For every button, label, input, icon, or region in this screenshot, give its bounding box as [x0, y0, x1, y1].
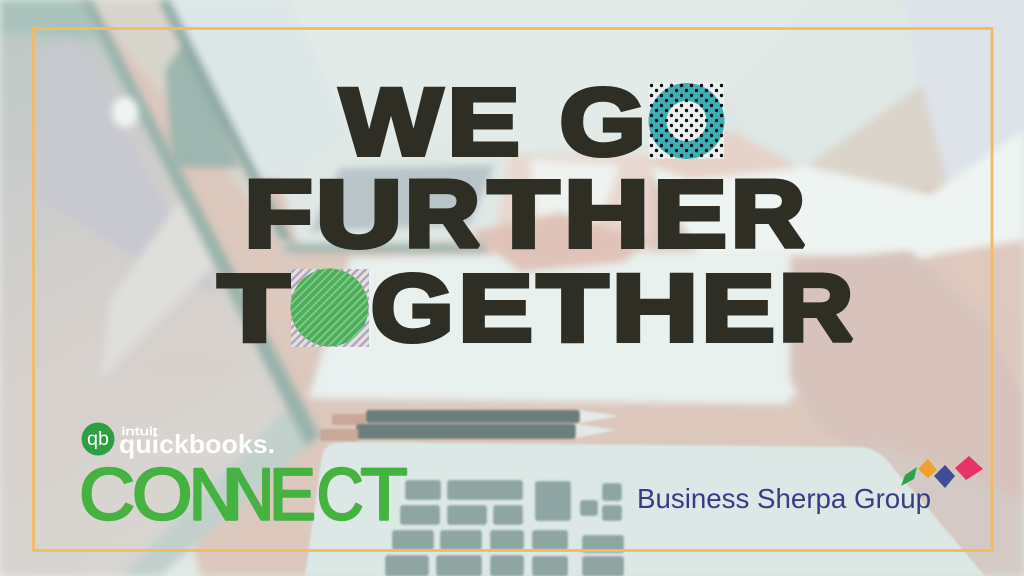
- headline line 3: T and GETHER: E: [702, 256, 775, 362]
- logo: Intuit QuickBooks Connect: [79, 422, 408, 536]
- headline line 1: WE G: W: [340, 70, 442, 176]
- headline line 2: FURTHER: H: [564, 162, 649, 268]
- logo: Business Sherpa Group: [637, 456, 983, 514]
- headline line 3: T and GETHER: T: [218, 256, 291, 362]
- headline line 2: FURTHER: F: [244, 162, 313, 268]
- text: intuit: intuit: [122, 426, 158, 438]
- text: CONNECT: E: [269, 454, 316, 536]
- headline line 2: FURTHER: E: [654, 162, 727, 268]
- headline line 2: FURTHER: R: [405, 162, 480, 268]
- headline line 3: T and GETHER: [218, 256, 853, 362]
- headline line 2: FURTHER: R: [731, 162, 805, 268]
- bottom laptop and keyboard: [305, 442, 985, 576]
- headline line 3: T and GETHER: E: [458, 256, 533, 362]
- headline line 1: WE G: E: [448, 70, 520, 176]
- icon: green O with diagonal stripes: [290, 268, 369, 347]
- text: CONNECT: C: [79, 454, 135, 536]
- icon: quickbooks circle: qb: [87, 429, 109, 450]
- text: CONNECT: T: [360, 454, 408, 536]
- headline line 3: T and GETHER: H: [612, 256, 698, 362]
- pens on the desk: [320, 410, 620, 441]
- icon: four coloured diamonds: [901, 456, 983, 488]
- headline line 1: WE G: G: [560, 70, 646, 176]
- headline line 2: FURTHER: [244, 162, 805, 268]
- text: CONNECT: N: [226, 454, 274, 536]
- icon: quickbooks circle: [82, 422, 114, 456]
- left laptop screen: [0, 0, 320, 576]
- headline line 2: FURTHER: U: [316, 162, 402, 268]
- text: CONNECT: [79, 454, 408, 536]
- text: CONNECT: O: [132, 454, 193, 536]
- headline: WE GO FURTHER TOGETHER: [218, 70, 853, 362]
- icon: teal O with dot pattern: [649, 83, 725, 159]
- headline line 3: T and GETHER: T: [537, 256, 608, 362]
- headline line 3: T and GETHER: R: [779, 256, 853, 362]
- headline line 2: FURTHER: T: [488, 162, 559, 268]
- headline line 3: T and GETHER: G: [371, 256, 454, 362]
- text: quickbooks: quickbooks.: [119, 429, 275, 459]
- text: CONNECT: N: [189, 454, 240, 536]
- text: CONNECT: C: [317, 454, 364, 536]
- text: Business Sherpa Group: Business Sherpa Group: [637, 483, 931, 514]
- headline line 1: WE G: [340, 70, 646, 176]
